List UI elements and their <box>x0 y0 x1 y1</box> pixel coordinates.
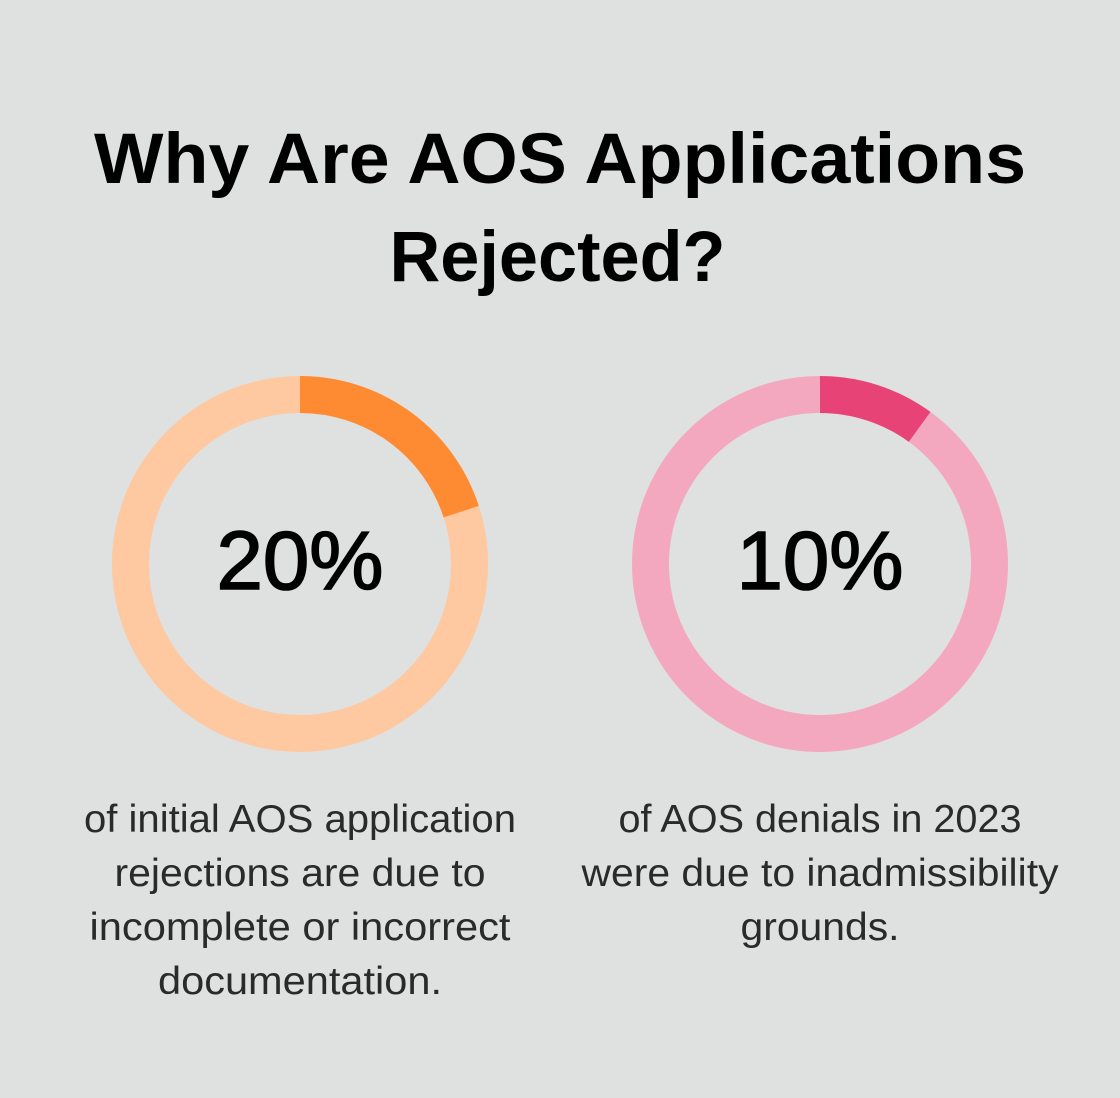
description: 20%: of initial AOS application <box>84 798 516 841</box>
title: Rejected? <box>390 218 726 297</box>
description: 20%: documentation. <box>158 960 442 1003</box>
value: 20%: 20% <box>216 514 384 607</box>
title: Why Are AOS Applications <box>94 120 1026 199</box>
description: 20% <box>84 798 516 1003</box>
value: 10%: 10% <box>736 514 904 607</box>
description: 10%: of AOS denials in 2023 <box>618 798 1022 841</box>
panel: 20% statistic <box>84 394 516 1003</box>
description: 10%: grounds. <box>740 906 900 949</box>
description: 20%: rejections are due to <box>114 852 485 895</box>
panel: 10% statistic <box>580 394 1059 949</box>
donut chart: 10% <box>650 394 990 734</box>
description: 20%: incomplete or incorrect <box>90 906 511 949</box>
title <box>94 120 1026 297</box>
description: 10%: were due to inadmissibility <box>580 852 1059 895</box>
donut chart: 20% <box>130 394 470 734</box>
description: 10% <box>580 798 1059 949</box>
